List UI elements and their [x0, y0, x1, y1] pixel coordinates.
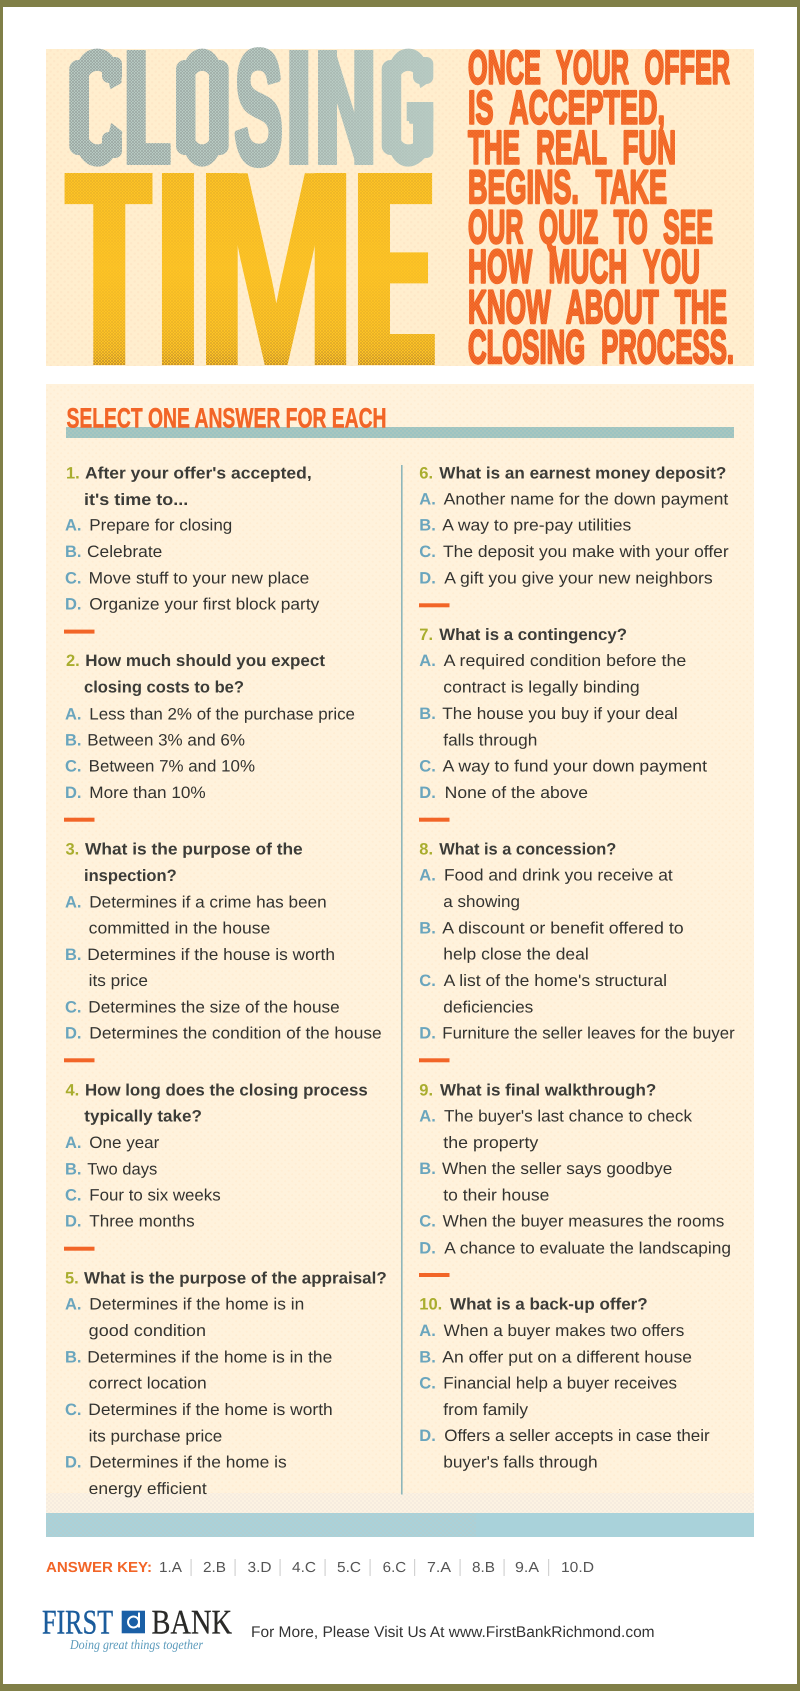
answer 2C: C.: [65, 758, 82, 776]
answer 6C: The deposit you make with your offer: [443, 543, 729, 561]
answer 7D: D.: [419, 784, 436, 802]
answer 3A: [65, 893, 327, 938]
answer 8C: deficiencies: [443, 998, 533, 1016]
question 2 prompt: [66, 652, 326, 697]
answer 5A: [65, 1296, 304, 1340]
question 6 prompt: What is an earnest money deposit?: [439, 464, 726, 482]
answer 8B: [419, 919, 684, 964]
heading: SELECT ONE ANSWER FOR EACH: [66, 403, 386, 434]
answer 6B: A way to pre-pay utilities: [442, 517, 631, 535]
answer 3B: [65, 946, 335, 990]
question 1: [65, 464, 320, 613]
answer 1B: B.: [65, 543, 82, 561]
answer 4C: Four to six weeks: [89, 1186, 221, 1204]
answer key: 3.D: [248, 1560, 272, 1576]
answer 5C: its purchase price: [89, 1427, 222, 1445]
answer 10B: B.: [419, 1348, 436, 1366]
answer 5D: D.: [65, 1454, 82, 1472]
answer 10B: An offer put on a different house: [442, 1348, 692, 1366]
answer key: 4.C: [292, 1560, 316, 1576]
answer 9A: the property: [443, 1134, 539, 1152]
answer 10D: D.: [419, 1427, 436, 1445]
answer 2A: Less than 2% of the purchase price: [89, 705, 355, 723]
question 7: [419, 626, 707, 802]
answer 8C: A list of the home's structural: [444, 972, 667, 990]
answer 2B: Between 3% and 6%: [87, 732, 245, 750]
question 9 prompt: 9.: [419, 1081, 433, 1099]
answer 7C: C.: [419, 758, 436, 776]
answer 2D: More than 10%: [89, 784, 206, 802]
question 2 prompt: How much should you expect: [85, 652, 326, 670]
answer 7B: The house you buy if your deal: [442, 705, 678, 723]
question 8 prompt: 8.: [419, 840, 433, 858]
title word: closing: C: [68, 18, 123, 198]
column separator: [401, 465, 403, 1494]
title word: closing: I: [284, 18, 313, 198]
answer 7B: [419, 705, 678, 749]
question 2 prompt: closing costs to be?: [84, 679, 244, 697]
question 1 prompt: After your offer's accepted,: [85, 464, 312, 482]
answer 3C: Determines the size of the house: [88, 998, 340, 1016]
question 3 prompt: What is the purpose of the: [85, 841, 303, 859]
answer 7A: A required condition before the: [444, 652, 686, 670]
question 3 prompt: [66, 841, 303, 885]
question 3 prompt: inspection?: [84, 867, 177, 885]
answer 3C: C.: [65, 998, 82, 1016]
answer 6D: D.: [419, 569, 436, 587]
answer 9B: When the seller says goodbye: [442, 1160, 672, 1178]
answer 3B: B.: [65, 946, 82, 964]
question 1 prompt: it's time to...: [84, 491, 188, 509]
question 6: [419, 464, 729, 587]
title word: closing: O: [175, 18, 230, 198]
answer 7A: contract is legally binding: [443, 679, 640, 697]
answer 10D: [419, 1427, 710, 1471]
answer 9D: A chance to evaluate the landscaping: [444, 1239, 731, 1257]
answer key: 5.C: [337, 1560, 361, 1576]
answer 4B: B.: [65, 1160, 82, 1178]
answer 10A: When a buyer makes two offers: [444, 1322, 684, 1340]
answer 9A: A.: [419, 1108, 436, 1126]
header panel: G: [381, 18, 435, 198]
answer 3B: its price: [89, 972, 148, 990]
answer 9C: When the buyer measures the rooms: [443, 1213, 724, 1231]
answer 4C: C.: [65, 1186, 82, 1204]
answer 4A: A.: [65, 1134, 82, 1152]
answer 5A: good condition: [89, 1322, 206, 1340]
question 2 prompt: 2.: [66, 652, 80, 670]
question 3 prompt: 3.: [66, 841, 79, 859]
answer 2C: Between 7% and 10%: [89, 758, 255, 776]
answer 5B: correct location: [89, 1375, 207, 1393]
title word: closing: S: [234, 18, 283, 198]
answer 4D: D.: [65, 1213, 82, 1231]
answer 7C: A way to fund your down payment: [443, 758, 707, 776]
answer 10C: Financial help a buyer receives: [443, 1375, 677, 1393]
answer 8A: [419, 867, 673, 911]
question 9 prompt: What is final walkthrough?: [440, 1081, 656, 1099]
answer 5D: Determines if the home is: [89, 1454, 287, 1472]
answer 1C: C.: [65, 569, 82, 587]
answer 9A: The buyer's last chance to check: [444, 1108, 693, 1126]
answer 8D: D.: [419, 1025, 436, 1043]
logo: First Bank: BANK: [152, 1603, 232, 1641]
answer key: 6.C: [383, 1560, 406, 1576]
title word: time: M: [196, 119, 356, 420]
answer key: 10.D: [561, 1560, 594, 1576]
answer key: 8.B: [472, 1560, 495, 1576]
answer key: ANSWER KEY:: [46, 1560, 152, 1576]
question 10 prompt: What is a back-up offer?: [450, 1295, 648, 1313]
answer 3A: Determines if a crime has been: [89, 893, 327, 911]
answer 4D: Three months: [89, 1213, 195, 1231]
blue footer bar: [46, 1513, 754, 1537]
answer 7B: B.: [419, 705, 436, 723]
question 7 prompt: What is a contingency?: [439, 626, 627, 644]
website line: For More, Please Visit Us At www.FirstBankRichmond.com: [251, 1624, 655, 1641]
icon: bank mark: [122, 1611, 145, 1633]
answer 4A: One year: [89, 1134, 160, 1152]
quiz panel: [46, 384, 754, 1513]
answer 8A: A.: [419, 867, 436, 885]
answer 5C: C.: [65, 1401, 82, 1419]
answer 5D: [65, 1454, 287, 1498]
answer 3A: committed in the house: [89, 920, 270, 938]
question 6 prompt: 6.: [419, 464, 433, 482]
logo: First Bank: Doing great things together: [69, 1637, 204, 1652]
answer key: 2.B: [203, 1560, 226, 1576]
answer 5B: B.: [65, 1348, 82, 1366]
answer 8B: A discount or benefit offered to: [442, 919, 684, 937]
answer 3D: Determines the condition of the house: [89, 1025, 382, 1043]
answer 8A: Food and drink you receive at: [444, 867, 673, 885]
answer 3A: A.: [65, 893, 82, 911]
answer 10C: [419, 1375, 677, 1419]
answer 8C: C.: [419, 972, 436, 990]
answer 3B: Determines if the house is worth: [87, 946, 335, 964]
answer 8B: help close the deal: [443, 946, 589, 964]
title word: closing: L: [123, 18, 172, 198]
question 4 prompt: typically take?: [84, 1108, 202, 1126]
answer 6D: A gift you give your new neighbors: [444, 569, 713, 587]
answer 5C: Determines if the home is worth: [88, 1401, 333, 1419]
question 10 prompt: 10.: [419, 1295, 442, 1313]
logo: First Bank: [42, 1603, 232, 1652]
answer 10C: from family: [443, 1401, 529, 1419]
intro text: [468, 41, 734, 373]
title word: closing: N: [314, 18, 377, 198]
answer 7A: A.: [419, 652, 436, 670]
answer 6A: A.: [419, 490, 436, 508]
answer 7A: [419, 652, 686, 697]
title word: time: I: [147, 113, 209, 425]
answer 2D: D.: [65, 784, 82, 802]
answer 9B: [419, 1160, 672, 1204]
question 3: [65, 841, 382, 1043]
answer 1B: Celebrate: [87, 543, 162, 561]
question 1 prompt: [66, 464, 312, 509]
answer 1D: D.: [65, 595, 82, 613]
question 9: [419, 1081, 731, 1257]
answer 1C: Move stuff to your new place: [89, 569, 309, 587]
answer 8B: B.: [419, 919, 436, 937]
question 5 prompt: What is the purpose of the appraisal?: [84, 1269, 387, 1287]
title word: time: [63, 113, 440, 425]
question 5 prompt: 5.: [65, 1269, 79, 1287]
answer 6C: C.: [419, 543, 436, 561]
answer 6A: Another name for the down payment: [444, 490, 729, 508]
question 5: [65, 1269, 387, 1498]
answer 9C: C.: [419, 1213, 436, 1231]
answer 1D: Organize your first block party: [89, 595, 320, 613]
header panel: [46, 18, 754, 425]
answer key: 7.A: [427, 1560, 451, 1576]
question 8: [419, 840, 735, 1043]
question 4: [65, 1082, 368, 1231]
answer 8C: [419, 972, 667, 1016]
logo: First Bank: FIRST: [42, 1603, 113, 1641]
title word: time: T: [63, 113, 154, 425]
answer 10C: C.: [419, 1375, 436, 1393]
question 4 prompt: 4.: [66, 1082, 79, 1100]
answer 5A: Determines if the home is in: [89, 1296, 304, 1314]
answer 5D: energy efficient: [89, 1480, 207, 1498]
answer 8A: a showing: [443, 893, 520, 911]
answer 7B: falls through: [443, 731, 537, 749]
answer 9A: [419, 1108, 693, 1152]
question 1 prompt: 1.: [66, 464, 80, 482]
answer 10A: A.: [419, 1322, 436, 1340]
answer 6B: B.: [419, 517, 436, 535]
question 4 prompt: How long does the closing process: [85, 1082, 368, 1100]
question 2: [65, 652, 355, 802]
answer 10D: Offers a seller accepts in case their: [444, 1427, 710, 1445]
answer 2A: A.: [65, 705, 82, 723]
question 4 prompt: [66, 1082, 368, 1126]
answer 5A: A.: [65, 1296, 82, 1314]
answer 1A: A.: [65, 517, 82, 535]
answer 10D: buyer's falls through: [443, 1453, 598, 1471]
answer 5B: Determines if the home is in the: [87, 1348, 332, 1366]
answer 2B: B.: [65, 732, 82, 750]
title word: closing: [68, 18, 435, 198]
answer key: [46, 1559, 594, 1576]
question 7 prompt: 7.: [419, 626, 433, 644]
answer 7D: None of the above: [445, 784, 588, 802]
answer 9D: D.: [419, 1239, 436, 1257]
heading bar: [66, 403, 734, 438]
answer 5C: [65, 1401, 333, 1445]
answer key: 9.A: [515, 1560, 539, 1576]
answer 1A: Prepare for closing: [89, 517, 232, 535]
answer 9B: B.: [419, 1160, 436, 1178]
answer 8D: Furniture the seller leaves for the buyer: [442, 1025, 735, 1043]
header panel: E: [349, 113, 440, 425]
question 8 prompt: What is a concession?: [439, 840, 616, 858]
answer 3D: D.: [65, 1025, 82, 1043]
answer 5B: [65, 1348, 332, 1393]
answer key: 1.A: [159, 1560, 182, 1576]
answer 9B: to their house: [443, 1186, 549, 1204]
question 10: [419, 1295, 710, 1471]
answer 4B: Two days: [87, 1160, 157, 1178]
